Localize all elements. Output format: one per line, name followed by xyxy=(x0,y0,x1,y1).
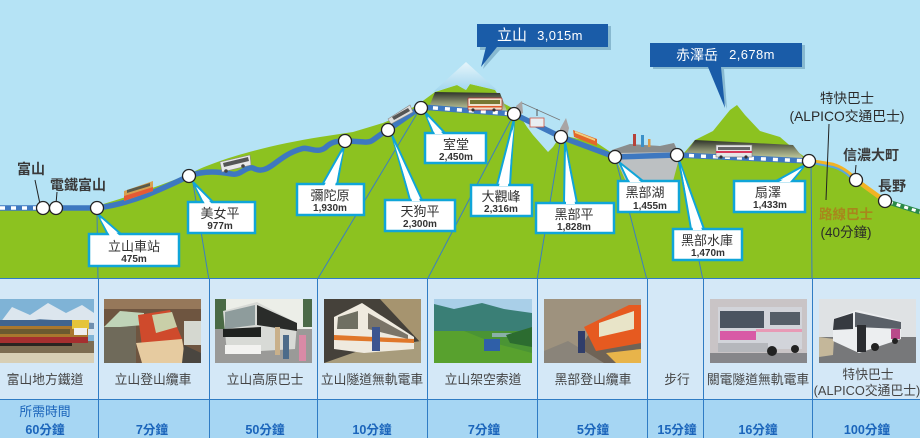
callout: Daikanbo xyxy=(471,119,532,216)
travel times: 100分鐘 xyxy=(844,422,891,437)
travel times: 10分鐘 xyxy=(352,422,392,437)
callout: Tengudaira: 天狗平 xyxy=(400,204,440,219)
vehicle: Toyama train xyxy=(124,181,153,201)
travel times: 16分鐘 xyxy=(738,422,778,437)
transport names: 富山地方鐵道 xyxy=(7,372,84,387)
transport names: 立山架空索道 xyxy=(445,372,522,387)
vehicle: ropeway gondola and towers xyxy=(516,101,569,141)
transport panel background xyxy=(0,278,920,438)
callout: Kurobedaira: 黑部平 xyxy=(554,207,594,222)
Tateyama tunnel shading xyxy=(429,92,507,111)
transport names: 立山登山纜車 xyxy=(115,372,192,387)
callout: Tateyama Station xyxy=(89,214,179,266)
callout: Ogizawa: 1,433m xyxy=(753,200,787,211)
connector lines from stations to transport columns xyxy=(35,107,856,280)
callout: Kurobe Dam: 黑部水庫 xyxy=(681,233,733,248)
vehicle: Kurobe cable car xyxy=(573,130,597,146)
transport names: 關電隧道無軌電車 xyxy=(707,372,809,387)
transport names: 黑部登山纜車 xyxy=(555,372,632,387)
callout: Kurobe Dam xyxy=(673,160,742,260)
travel times: 15分鐘 xyxy=(657,422,697,437)
transport names: 立山隧道無軌電車 xyxy=(321,372,423,387)
terrain: green ground and mountains xyxy=(0,62,920,280)
peak flag: Akazawa: 2,678m xyxy=(729,47,775,62)
callout: Tengudaira xyxy=(385,135,455,231)
map label: route bus 40 minutes xyxy=(819,206,873,240)
peak flag: Akazawa xyxy=(650,43,805,109)
photo: Toyama railway xyxy=(0,299,94,363)
peak flag: Tateyama: 3,015m xyxy=(537,28,583,43)
callout: Bijodaira: 美女平 xyxy=(200,206,240,221)
callout: Kurobedaira: 1,828m xyxy=(557,222,591,233)
travel times: 50分鐘 xyxy=(245,422,285,437)
map label: route bus 40 minutes: (40分鐘) xyxy=(820,224,872,240)
icon: hikers on Kurobe dam xyxy=(633,134,650,147)
callout: Midagahara: 彌陀原 xyxy=(310,188,350,203)
travel times: 所需時間 xyxy=(19,404,71,419)
Akazawa tunnel shading xyxy=(685,140,804,159)
callout: Ogizawa: 扇澤 xyxy=(755,185,781,200)
map label: Nagano: 長野 xyxy=(878,178,906,194)
photo: Alpico express bus xyxy=(819,299,916,363)
transport names: 立山高原巴士 xyxy=(227,372,304,387)
photo: Kanden tunnel trolley bus xyxy=(710,299,807,363)
map label: express bus: (ALPICO交通巴士) xyxy=(790,108,904,124)
callout: Kurobedaira xyxy=(536,142,614,233)
callout: Daikanbo: 2,316m xyxy=(484,204,518,215)
callout: Bijodaira: 977m xyxy=(207,221,233,232)
callout: Kurobe Dam: 1,470m xyxy=(691,248,725,259)
map label: route bus 40 minutes: 路線巴士 xyxy=(819,206,873,222)
transport names: (ALPICO交通巴士) xyxy=(814,383,920,398)
travel times: 7分鐘 xyxy=(136,422,168,437)
peak flag: Tateyama xyxy=(477,24,611,69)
map label: Shinano-Omachi: 信濃大町 xyxy=(843,147,899,163)
transport names xyxy=(7,367,920,398)
vehicle: Murodo bus xyxy=(468,98,502,112)
map label: Dentetsu Toyama: 電鐵富山 xyxy=(50,177,106,193)
callout: Tengudaira: 2,300m xyxy=(403,219,437,230)
photo: Kurobe cable car xyxy=(544,299,641,363)
transport names: 步行 xyxy=(664,372,690,387)
travel times: 60分鐘 xyxy=(25,422,65,437)
callout: Midagahara xyxy=(297,146,364,215)
callout: Daikanbo: 大觀峰 xyxy=(481,189,521,204)
map label: Toyama: 富山 xyxy=(17,161,45,177)
map label: express bus: 特快巴士 xyxy=(820,91,874,106)
Tateyama snow cap xyxy=(433,62,497,92)
photo: Tateyama cable car xyxy=(104,299,201,363)
photo: Tateyama tunnel trolley bus xyxy=(324,299,421,363)
callout: Kurobeko: 1,455m xyxy=(633,201,667,212)
peak flag: Akazawa: 赤澤岳 xyxy=(676,47,718,63)
vehicle: tunnel trolley bus xyxy=(388,105,413,124)
travel times: 5分鐘 xyxy=(577,422,609,437)
callout: Tateyama Station: 475m xyxy=(121,254,147,265)
photo: Tateyama highland bus xyxy=(215,299,312,363)
callout: Murodo: 室堂 xyxy=(443,137,469,152)
callout: Kurobeko: 黑部湖 xyxy=(625,185,665,200)
transport names: 特快巴士 xyxy=(842,367,894,382)
route line xyxy=(0,107,920,212)
callout: Murodo xyxy=(425,112,486,163)
peak flag: Tateyama: 立山 xyxy=(497,27,527,44)
stations xyxy=(36,102,892,214)
Kurobe dam xyxy=(612,143,680,200)
callout: Tateyama Station: 立山車站 xyxy=(108,239,160,254)
callout: Ogizawa xyxy=(734,165,805,212)
callout: Murodo: 2,450m xyxy=(439,152,473,163)
photo: Tateyama ropeway xyxy=(434,299,532,363)
travel times: 7分鐘 xyxy=(468,422,500,437)
callout: Kurobeko xyxy=(618,162,679,212)
vehicle: Kanden trolley bus xyxy=(716,145,752,159)
vehicle: highland bus xyxy=(220,155,251,173)
travel times xyxy=(19,404,891,437)
callout: Bijodaira xyxy=(188,182,255,233)
map label: express bus xyxy=(790,91,904,124)
callout: Midagahara: 1,930m xyxy=(313,203,347,214)
